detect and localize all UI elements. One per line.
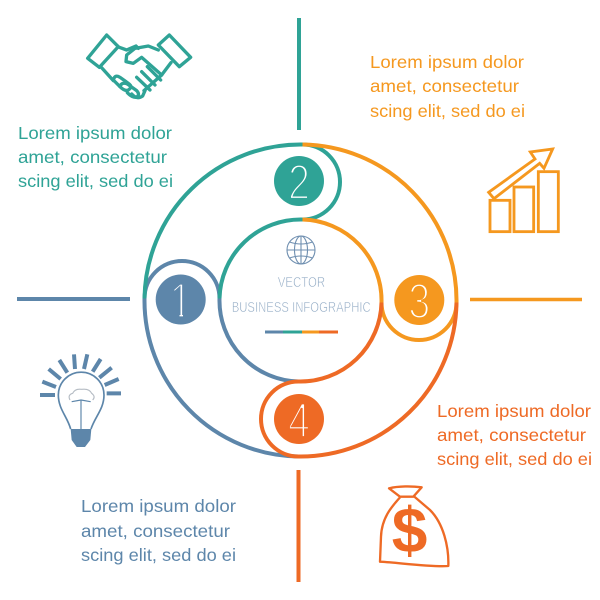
connector line: orange right (470, 298, 582, 301)
text block: teal (18, 123, 173, 191)
badge 4 (274, 394, 324, 448)
icon: money bag: $ (392, 494, 427, 566)
text block: blue (81, 496, 236, 565)
text block: red: amet, consectetur (437, 425, 586, 445)
ring segment: red (261, 302, 456, 457)
text block: orange: amet, consectetur (370, 76, 519, 96)
badge 2: 2 (288, 156, 310, 210)
text block: red: Lorem ipsum dolor (437, 401, 591, 421)
text block: red: scing elit, sed do ei (437, 449, 592, 469)
icon: handshake (88, 35, 191, 98)
connector line: red bottom (296, 470, 300, 582)
center title: VECTOR (278, 275, 325, 291)
text block: teal: Lorem ipsum dolor (18, 123, 172, 143)
text block: orange: Lorem ipsum dolor (370, 52, 524, 72)
icon: light bulb (40, 354, 121, 447)
text block: teal: amet, consectetur (18, 147, 167, 167)
ring segment: blue (144, 261, 298, 456)
connector line: teal top (297, 18, 301, 130)
icon: growth chart (489, 149, 558, 232)
ring segment: orange (302, 144, 457, 340)
badge 1 (156, 274, 206, 329)
ring segment: teal (144, 144, 340, 298)
connector line: blue left (17, 297, 130, 301)
center title (232, 275, 371, 316)
text block: blue: scing elit, sed do ei (81, 545, 236, 565)
center title: BUSINESS INFOGRAPHIC (232, 300, 371, 316)
text block: blue: amet, consectetur (81, 521, 230, 541)
icon: globe (287, 236, 315, 264)
text block: blue: Lorem ipsum dolor (81, 496, 236, 516)
badge 1: 1 (170, 274, 192, 329)
text block: orange (370, 52, 525, 121)
badge 2 (274, 156, 324, 210)
badge 3: 3 (408, 275, 430, 329)
text block: orange: scing elit, sed do ei (370, 101, 525, 121)
center color bar (265, 330, 338, 334)
badge 3 (394, 275, 444, 329)
ring diagram (144, 144, 457, 457)
text block: red (437, 401, 592, 469)
icon: money bag (380, 486, 448, 566)
badge 4: 4 (288, 394, 310, 448)
text block: teal: scing elit, sed do ei (18, 171, 173, 191)
